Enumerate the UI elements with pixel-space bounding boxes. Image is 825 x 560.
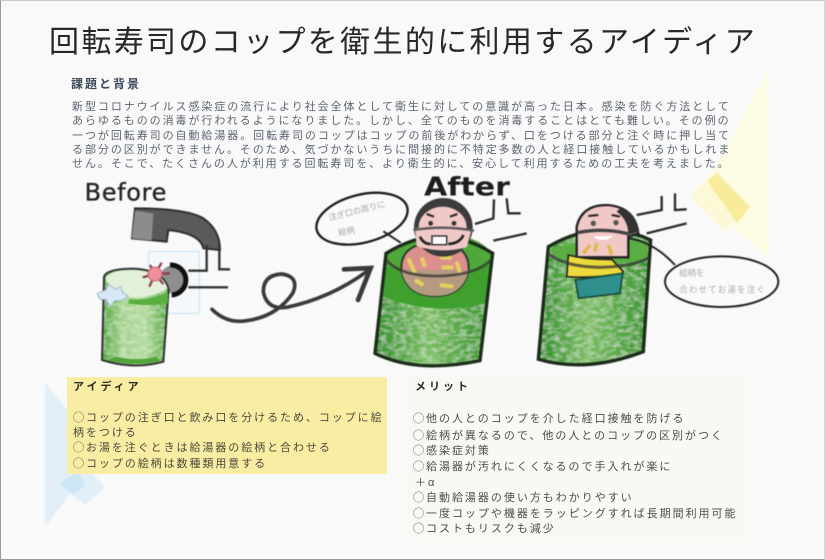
text block: idea list: ◯コップの注ぎ口と飲み口を分けるため、コップに絵 <box>73 412 384 424</box>
callout: left bubble <box>311 184 413 253</box>
icon: daruma pattern <box>401 198 474 296</box>
icon: faucet lines <box>637 193 687 233</box>
text block: merits list: ◯給湯器が汚れにくくなるので手入れが楽に <box>413 461 672 473</box>
text block: background paragraph: あらゆるものの消毒が行われるようになりました。しかし、全てのものを消毒することはとても難しい。その例の <box>72 115 731 127</box>
text block: merits list <box>413 412 738 535</box>
heading: アイディア: アイディア <box>73 381 142 393</box>
panel: idea <box>67 377 387 474</box>
heading: 課題と背景: 課題と背景 <box>71 77 141 91</box>
icon: cup rim line <box>387 259 492 276</box>
text block: merits list: ◯感染症対策 <box>413 445 491 457</box>
icon: faucet <box>132 208 230 287</box>
text block: idea list: 柄をつける <box>73 427 138 439</box>
label: After: After <box>424 172 510 202</box>
icon: dispenser button <box>159 265 187 295</box>
text block: idea list <box>73 412 384 470</box>
icon: dispenser pattern <box>567 205 638 298</box>
text block: merits list: ◯一度コップや機器をラッピングすれば長期間利用可能 <box>413 508 738 520</box>
icon: faucet lines <box>475 198 527 241</box>
after drawing: cup and dispenser matched <box>538 193 778 365</box>
before drawing <box>85 179 230 365</box>
icon: cup before <box>102 269 169 365</box>
after drawing: cup with pattern <box>311 172 527 366</box>
text block: background paragraph <box>72 100 731 170</box>
icon: virus <box>143 263 170 287</box>
text block: merits list: ◯自動給湯器の使い方もわかりやすい <box>413 492 634 504</box>
callout: left bubble: 絵柄 <box>338 225 355 237</box>
callout: left bubble: 注ぎ口の周りに <box>327 199 386 223</box>
text block: background paragraph: 新型コロナウイルス感染症の流行により社会全体として衛生に対しての意識が高った日本。感染を防ぐ方法として <box>72 101 731 113</box>
icon: cup rim line <box>548 253 650 267</box>
text block: merits list: ◯他の人とのコップを介した経口接触を防げる <box>413 413 685 425</box>
label: Before: Before <box>85 179 166 207</box>
text block: idea list: ◯お湯を注ぐときは給湯器の絵柄と合わせる <box>73 442 332 454</box>
text block: merits list: ＋α <box>415 477 436 489</box>
text block: background paragraph: る部分の区別ができません。そのため、気づかないうちに間接的に不特定多数の人と経口接触しているかもしれま <box>72 144 731 156</box>
text block: background paragraph: 一つが回転寿司の自動給湯器。回転寿司のコップはコップの前後がわからず、口をつける部分と注ぐ時に押し当て <box>72 130 731 142</box>
callout: right bubble: 合わせてお湯を注ぐ <box>679 285 766 295</box>
icon: splash <box>97 284 128 307</box>
text block: idea list: ◯コップの絵柄は数種類用意する <box>73 458 267 470</box>
icon: green cup <box>538 230 651 365</box>
callout: right bubble <box>628 238 778 307</box>
panel: merits <box>405 377 750 542</box>
text block: background paragraph: せん。そこで、たくさんの人が利用する回転寿司を、より衛生的に、安心して利用するための工夫を考えました。 <box>72 158 731 170</box>
title: 回転寿司のコップを衛生的に利用するアイディア <box>49 26 757 59</box>
icon: cup after <box>375 234 493 366</box>
text block: merits list: ◯コストもリスクも減少 <box>413 523 556 535</box>
callout: right bubble: 絵柄を <box>679 268 704 278</box>
icon: guide square <box>149 251 199 313</box>
text block: merits list: ◯絵柄が異なるので、他の人とのコップの区別がつく <box>413 430 724 442</box>
heading: メリット: メリット <box>415 381 471 393</box>
arrow: before to after <box>212 268 371 321</box>
